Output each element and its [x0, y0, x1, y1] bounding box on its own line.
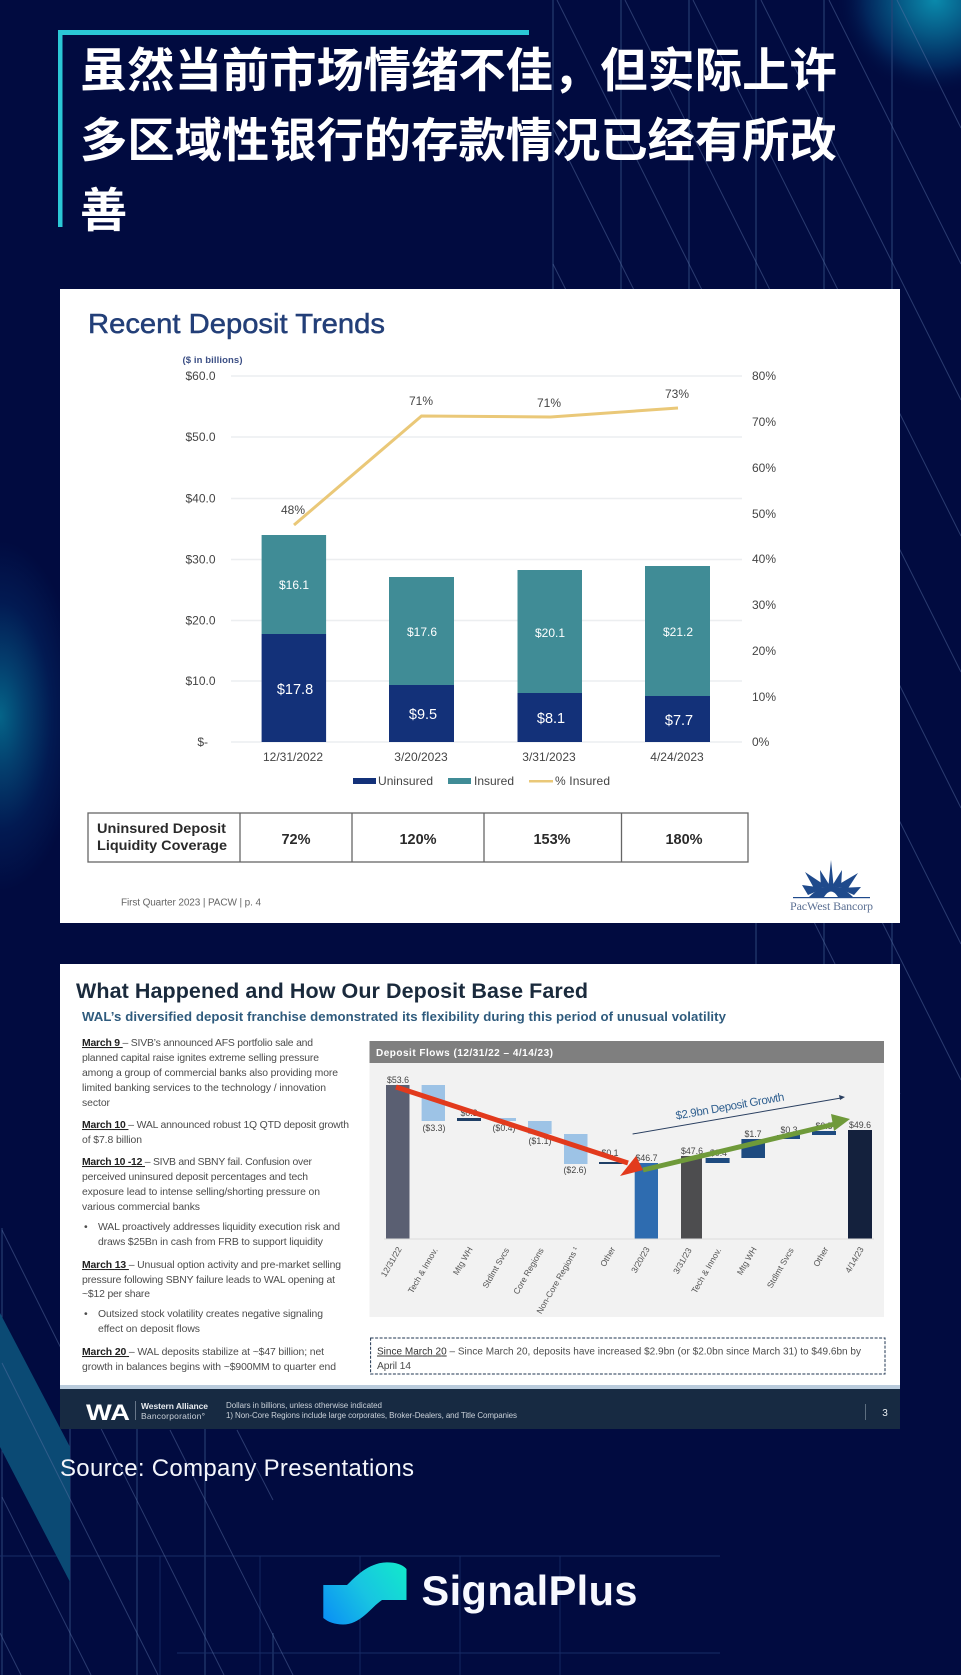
- arrow: decline: [396, 1087, 643, 1176]
- stacked bar chart with percent line: $-: [197, 735, 208, 749]
- waterfall chart: deposit flows: $49.6: [849, 1120, 871, 1130]
- waterfall chart: deposit flows: Tech & Innov.: [689, 1246, 723, 1295]
- panel heading: Recent Deposit Trends: [88, 308, 385, 339]
- growth label: $2.9bn Deposit Growth: [675, 1092, 785, 1123]
- panel subheading: WAL’s diversified deposit franchise demonstrated its flexibility during this period of unusual volatility: [82, 1009, 727, 1024]
- title: 多区域性银行的存款情况已经有所改: [80, 102, 837, 171]
- waterfall chart: deposit flows: 3/31/23: [671, 1246, 694, 1276]
- title accent bracket: [58, 30, 529, 227]
- timeline text: March 10 – WAL announced robust 1Q QTD deposit growth: [82, 1120, 349, 1131]
- stacked bar chart with percent line: $20.0: [185, 614, 216, 628]
- timeline text: March 13 – Unusual option activity and pre-market selling: [82, 1260, 341, 1271]
- callout: since March 20: Since March 20 – Since March 20, deposits have increased $2.9bn (or $2.0bn since March 31) to $49.6bn by: [377, 1346, 861, 1358]
- legend: Insured: [474, 774, 514, 788]
- callout: since March 20: [371, 1338, 885, 1374]
- waterfall chart: deposit flows: Deposit Flows (12/31/22 – 4/14/23): [376, 1048, 553, 1059]
- waterfall chart: deposit flows: $0.4: [710, 1148, 727, 1158]
- waterfall chart: deposit flows: $0.3: [780, 1125, 798, 1135]
- callout: since March 20: April 14: [377, 1361, 411, 1372]
- slide footer bar: [60, 1385, 900, 1429]
- timeline text: Outsized stock volatility creates negative signaling: [98, 1309, 323, 1320]
- stacked bar chart with percent line: $40.0: [185, 492, 216, 506]
- arrow: growth: [643, 1114, 850, 1170]
- panel heading: What Happened and How Our Deposit Base Fared: [76, 979, 588, 1003]
- liquidity coverage table: Uninsured Deposit: [97, 820, 226, 836]
- waterfall chart: deposit flows: $0.5: [815, 1121, 833, 1131]
- stacked bar chart with percent line: 4/24/2023: [650, 750, 704, 764]
- timeline text: perceived uninsured deposit percentages and tech: [82, 1172, 308, 1183]
- panel: Western Alliance deposit base: [60, 964, 900, 1429]
- timeline text: draws $25Bn in cash from FRB to support liquidity: [98, 1237, 324, 1248]
- title: 虽然当前市场情绪不佳，但实际上许: [80, 32, 837, 101]
- icon: Western Alliance logo: WA: [86, 1400, 130, 1425]
- timeline text: growth in balances begins with ~$900MM to quarter end: [82, 1362, 336, 1373]
- stacked bar chart with percent line: 73%: [665, 387, 689, 401]
- stacked bar chart with percent line: $30.0: [185, 552, 216, 566]
- stacked bar chart with percent line: $10.0: [185, 674, 216, 688]
- stacked bar chart with percent line: $60.0: [185, 369, 216, 383]
- icon: SignalPlus logo: [323, 1562, 638, 1624]
- stacked bar chart with percent line: 20%: [752, 644, 776, 658]
- stacked bar chart with percent line: 71%: [537, 396, 561, 410]
- arrow: growth trend: [633, 1095, 845, 1134]
- slide footer bar: Western Alliance: [141, 1401, 208, 1411]
- timeline text: planned capital raise ignites extreme selling pressure: [82, 1053, 319, 1064]
- timeline text: [82, 1038, 349, 1373]
- stacked bar chart with percent line: $16.1: [279, 578, 309, 592]
- title: 善: [80, 172, 127, 241]
- slide footer bar: Dollars in billions, unless otherwise indicated: [226, 1401, 382, 1410]
- waterfall chart: deposit flows: ($2.6): [564, 1165, 587, 1175]
- stacked bar chart with percent line: 50%: [752, 507, 776, 521]
- slide footer bar: Bancorporation°: [141, 1411, 205, 1421]
- units note: ($ in billions): [182, 355, 242, 366]
- timeline text: exposure lead to intense selling/shorting pressure on: [82, 1187, 320, 1198]
- waterfall chart: deposit flows: Tech & Innov.: [406, 1246, 440, 1295]
- timeline text: among a group of commercial banks also providing more: [82, 1068, 338, 1079]
- source note: Source: Company Presentations: [60, 1455, 414, 1482]
- legend: Uninsured: [378, 774, 433, 788]
- timeline text: various commercial banks: [82, 1202, 200, 1213]
- stacked bar chart with percent line: 0%: [752, 735, 770, 749]
- stacked bar chart with percent line: 80%: [752, 369, 776, 383]
- stacked bar chart with percent line: $20.1: [535, 626, 565, 640]
- waterfall chart: deposit flows: Stdlmt Svcs: [765, 1246, 796, 1290]
- waterfall chart: deposit flows: Other: [811, 1245, 830, 1268]
- legend: % Insured: [555, 774, 610, 788]
- stacked bar chart with percent line: $21.2: [663, 625, 693, 639]
- stacked bar chart with percent line: $17.8: [277, 682, 313, 698]
- waterfall chart: deposit flows: [370, 1041, 884, 1317]
- timeline text: WAL proactively addresses liquidity execution risk and: [98, 1222, 340, 1233]
- waterfall chart: deposit flows: $0.1: [601, 1148, 619, 1158]
- title: [80, 32, 837, 241]
- waterfall chart: deposit flows: ($0.4): [493, 1123, 516, 1133]
- waterfall chart: deposit flows: $1.7: [744, 1129, 762, 1139]
- waterfall chart: deposit flows: Mtg WH: [451, 1245, 475, 1277]
- icon: PacWest Bancorp logo: PacWest Bancorp: [790, 899, 873, 913]
- timeline text: limited banking services to the technology / innovation: [82, 1083, 326, 1094]
- timeline text: March 9 – SIVB’s announced AFS portfolio sale and: [82, 1038, 313, 1049]
- timeline text: March 20 – WAL deposits stabilize at ~$47 billion; net: [82, 1347, 324, 1358]
- stacked bar chart with percent line: 60%: [752, 461, 776, 475]
- stacked bar chart with percent line: 3/31/2023: [522, 750, 576, 764]
- liquidity coverage table: Liquidity Coverage: [97, 837, 227, 853]
- waterfall chart: deposit flows: $47.6: [681, 1146, 703, 1156]
- stacked bar chart with percent line: 40%: [752, 552, 776, 566]
- waterfall chart: deposit flows: Mtg WH: [735, 1245, 759, 1277]
- liquidity coverage table: 180%: [665, 832, 703, 848]
- timeline text: •: [84, 1222, 88, 1233]
- panel: PacWest recent deposit trends: [60, 289, 900, 923]
- timeline text: pressure following SBNY failure leads to WAL opening at: [82, 1275, 335, 1286]
- stacked bar chart with percent line: 71%: [409, 394, 433, 408]
- stacked bar chart with percent line: $9.5: [409, 707, 437, 723]
- waterfall chart: deposit flows: $53.6: [387, 1075, 409, 1085]
- waterfall chart: deposit flows: 4/14/23: [843, 1245, 866, 1275]
- slide footer bar: 1) Non-Core Regions include large corporates, Broker-Dealers, and Title Companies: [226, 1411, 517, 1420]
- legend: [353, 774, 610, 788]
- timeline text: ~$12 per share: [82, 1289, 150, 1300]
- liquidity coverage table: [88, 813, 748, 862]
- stacked bar chart with percent line: 12/31/2022: [263, 750, 323, 764]
- timeline text: March 10 -12 – SIVB and SBNY fail. Confusion over: [82, 1157, 313, 1168]
- liquidity coverage table: 72%: [281, 832, 311, 848]
- stacked bar chart with percent line: 3/20/2023: [394, 750, 448, 764]
- stacked bar chart with percent line: $50.0: [185, 430, 216, 444]
- waterfall chart: deposit flows: ($3.3): [423, 1123, 446, 1133]
- slide footer: First Quarter 2023 | PACW | p. 4: [121, 898, 261, 908]
- stacked bar chart with percent line: 70%: [752, 415, 776, 429]
- waterfall chart: deposit flows: Other: [598, 1245, 617, 1268]
- liquidity coverage table: 120%: [399, 832, 437, 848]
- waterfall chart: deposit flows: $46.7: [635, 1153, 658, 1163]
- wordmark: SignalPlus: [422, 1567, 638, 1614]
- icon: PacWest Bancorp logo: [790, 860, 873, 913]
- stacked bar chart with percent line: 10%: [752, 690, 776, 704]
- stacked bar chart with percent line: $7.7: [665, 713, 693, 729]
- waterfall chart: deposit flows: $0.3: [460, 1108, 478, 1118]
- waterfall chart: deposit flows: 3/20/23: [629, 1245, 652, 1275]
- timeline text: sector: [82, 1098, 111, 1109]
- waterfall chart: deposit flows: Stdlmt Svcs: [480, 1246, 511, 1290]
- waterfall chart: deposit flows: Core Regions: [511, 1246, 546, 1296]
- timeline text: of $7.8 billion: [82, 1135, 142, 1146]
- timeline text: •: [84, 1309, 88, 1320]
- slide footer bar: 3: [882, 1408, 888, 1419]
- stacked bar chart with percent line: $17.6: [407, 625, 437, 639]
- stacked bar chart with percent line: 48%: [281, 503, 305, 517]
- waterfall chart: deposit flows: 12/31/22: [379, 1245, 404, 1279]
- waterfall chart: deposit flows: ($1.1): [529, 1136, 552, 1146]
- timeline text: effect on deposit flows: [98, 1324, 200, 1335]
- stacked bar chart with percent line: $8.1: [537, 711, 565, 727]
- waterfall chart: deposit flows: Non-Core Regions ¹: [534, 1245, 581, 1315]
- stacked bar chart with percent line: [185, 369, 776, 764]
- liquidity coverage table: 153%: [533, 832, 571, 848]
- stacked bar chart with percent line: 30%: [752, 598, 776, 612]
